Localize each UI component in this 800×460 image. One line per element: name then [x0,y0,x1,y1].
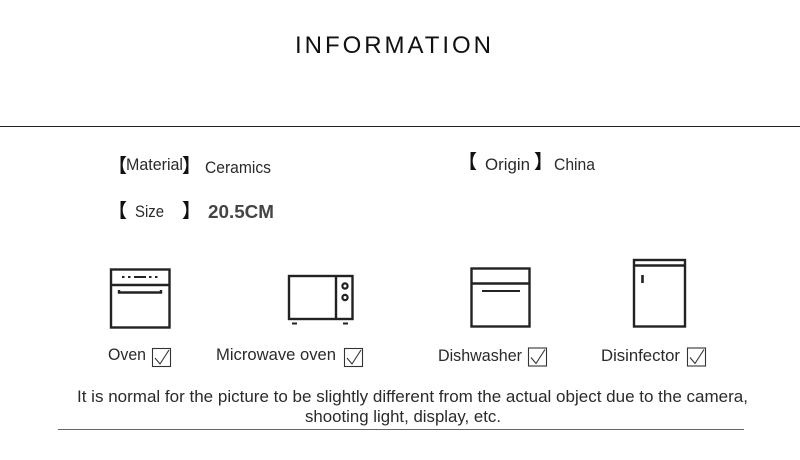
label: oven: Oven [108,346,146,364]
footer divider [58,429,744,430]
spec: origin [458,147,595,174]
spec: material: Material [126,156,183,174]
label: dishwasher: Dishwasher [438,347,522,365]
spec: material: 】 [182,151,201,178]
spec: size: 20.5CM [208,202,274,222]
icon: microwave [289,276,352,324]
disclaimer text: shooting light, display, etc. [305,408,501,426]
icon: oven [111,270,170,328]
spec: size: 【 [108,196,127,223]
icon: disinfector [634,260,685,326]
label: oven [108,346,170,366]
spec: size: Size [135,203,164,221]
header divider [0,126,800,127]
spec: material: Ceramics [205,159,271,177]
label: microwave oven: Microwave oven [216,346,336,364]
spec: material: 【 [108,151,127,178]
disclaimer text: It is normal for the picture to be slightly different from the actual object due to the camera, [77,388,748,406]
spec: origin: Origin [485,155,530,174]
icon: dishwasher [472,268,530,326]
spec: origin: 【 [458,147,477,174]
spec: origin: 】 [534,147,553,174]
spec: size [108,196,274,223]
spec: material [108,151,271,178]
title: INFORMATION [295,32,491,59]
spec: size: 】 [182,196,201,223]
label: disinfector: Disinfector [601,347,680,365]
spec: origin: China [554,155,595,174]
disclaimer text [77,388,748,426]
